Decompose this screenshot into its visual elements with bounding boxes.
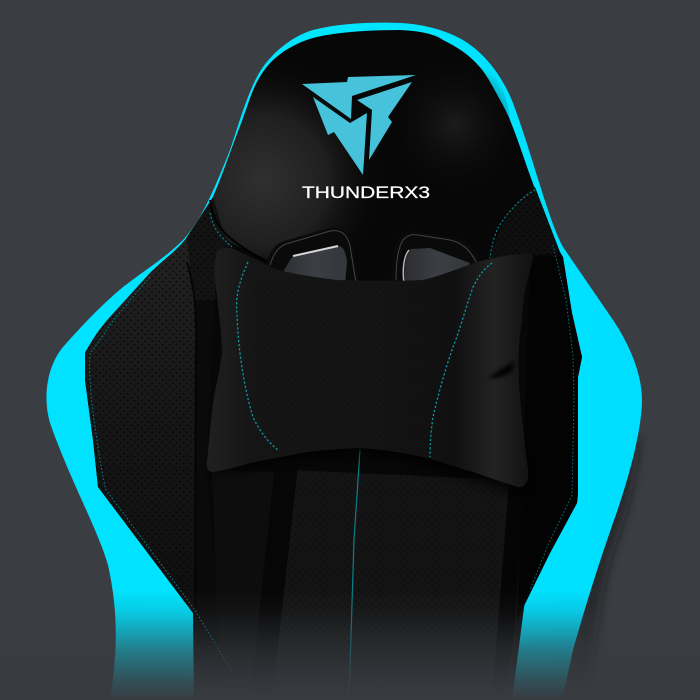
right shoulder panel bbox=[490, 187, 560, 258]
side column bbox=[194, 300, 225, 700]
right shoulder perforation bbox=[490, 187, 560, 258]
pillow right stitching bbox=[430, 263, 492, 457]
pillow perforated centre bbox=[240, 272, 467, 455]
logo top shard bbox=[302, 75, 416, 119]
left headrest opening bbox=[266, 228, 360, 285]
right black column bbox=[517, 255, 582, 620]
pillow shadow bbox=[210, 440, 535, 498]
headrest right sheen bbox=[400, 55, 510, 195]
lower backrest bbox=[212, 470, 528, 700]
left shoulder perforation bbox=[187, 197, 232, 320]
logo right shard bbox=[357, 82, 412, 160]
pillow crease bbox=[488, 362, 515, 378]
seams and stitching bbox=[89, 190, 574, 700]
lower backrest perforation bbox=[270, 470, 510, 700]
right headrest opening bbox=[391, 231, 482, 285]
right wing shadow bbox=[555, 430, 640, 700]
pillow left stitching bbox=[237, 262, 278, 450]
logo left shard bbox=[313, 97, 367, 175]
brand wordmark: THUNDERX3 bbox=[302, 184, 430, 202]
lower strap bbox=[250, 465, 298, 700]
lower right fold bbox=[492, 470, 525, 700]
logo mark bbox=[302, 75, 416, 175]
left side panel bbox=[85, 237, 196, 613]
left shoulder panel bbox=[187, 197, 232, 320]
bottom fade bbox=[0, 590, 700, 700]
black chair body bbox=[85, 30, 582, 700]
headrest shading bbox=[213, 30, 553, 262]
lower perforation texture bbox=[270, 470, 510, 700]
left panel perforation bbox=[85, 237, 196, 613]
pillow bbox=[207, 248, 534, 487]
